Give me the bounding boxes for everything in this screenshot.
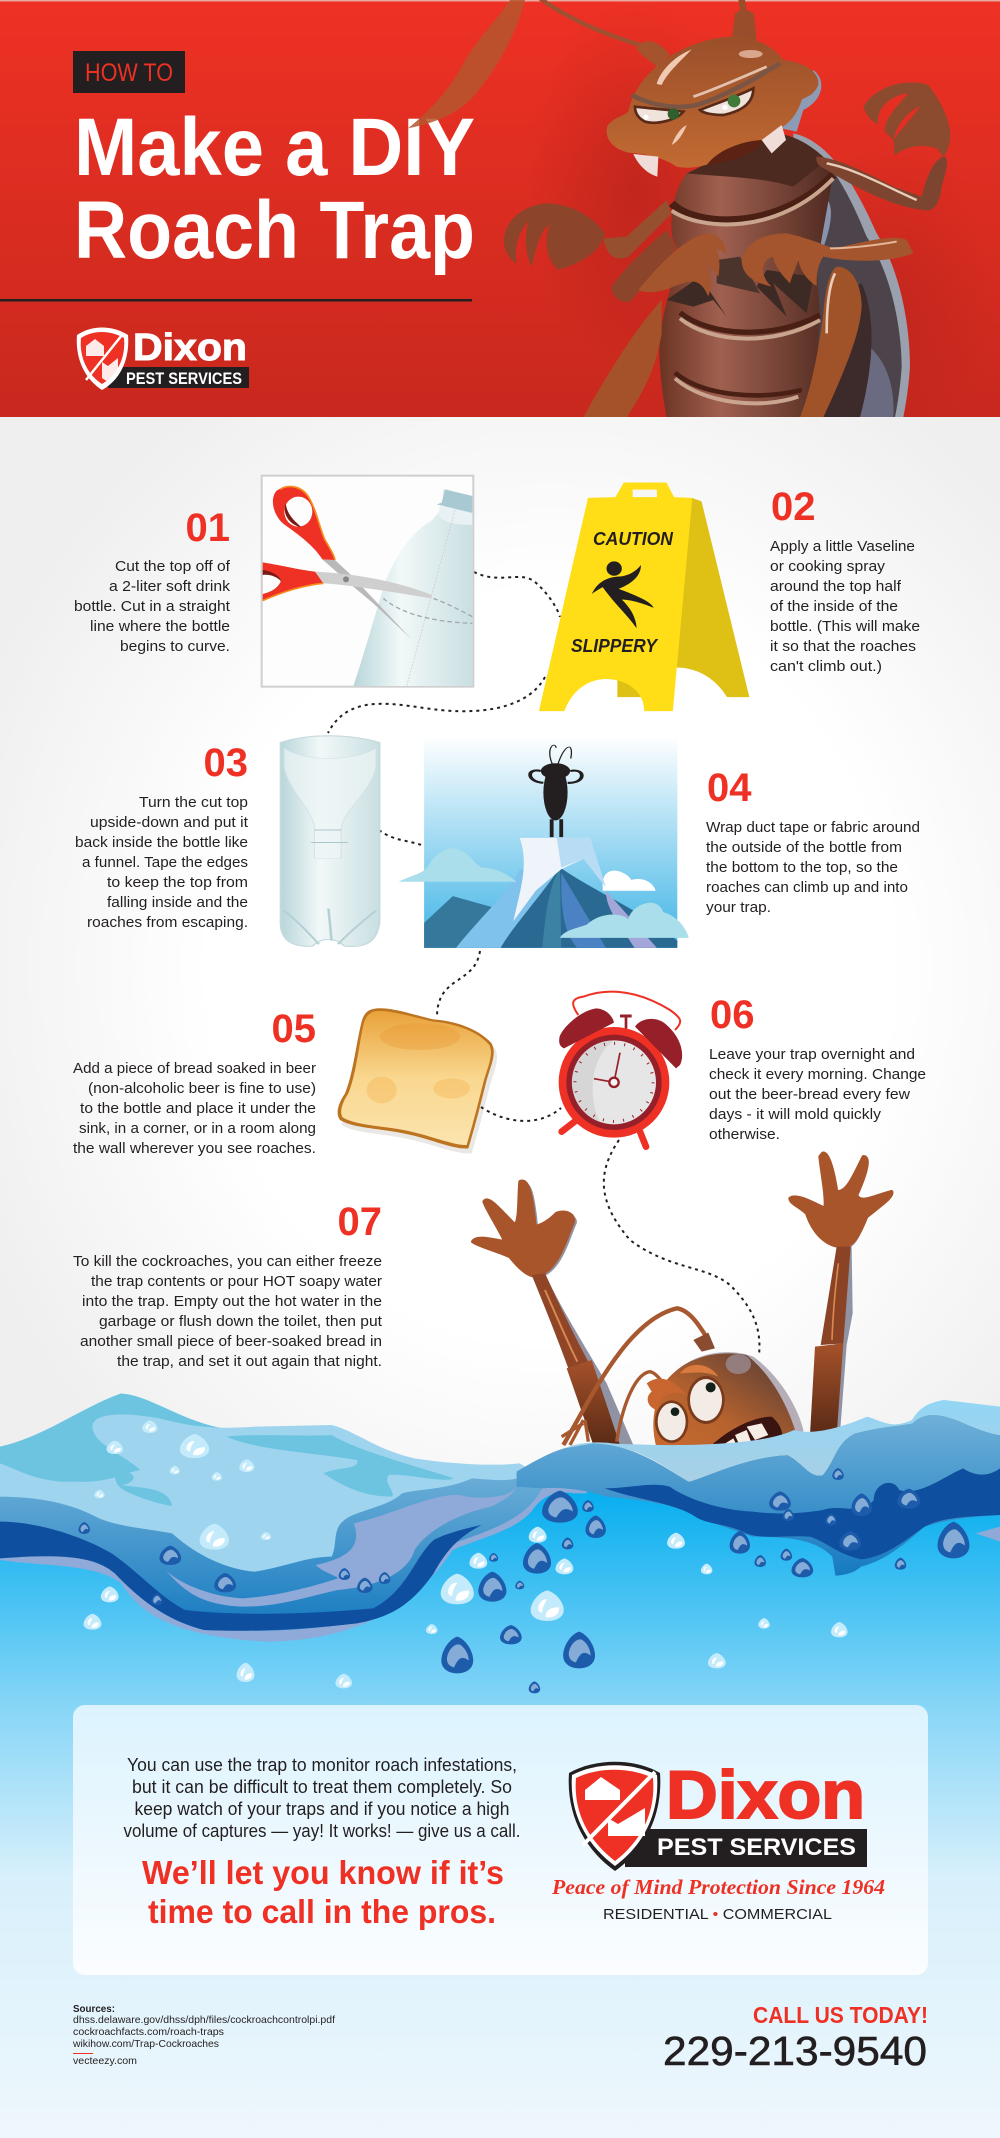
step 02 text: can't climb out.) — [770, 659, 882, 675]
step 02 text — [770, 485, 920, 675]
title: Make a DIY — [74, 102, 475, 193]
text: sources: vecteezy.com — [73, 2055, 137, 2067]
step 02 text: 02 — [771, 485, 816, 529]
droplets: water bubbles — [78, 1420, 969, 1693]
text: closing paragraph: You can use the trap to monitor roach infestations, — [127, 1755, 517, 1775]
title — [74, 102, 475, 276]
sea gradient — [0, 1490, 1000, 2138]
callout: call in the pros: We’ll let you know if it’s — [142, 1854, 504, 1891]
connector: dotted paths between steps — [328, 572, 759, 1355]
illustration: water waves — [0, 1393, 1000, 1642]
step 07 text: garbage or flush down the toilet, then put — [99, 1314, 382, 1330]
step 03 text: to keep the top from — [107, 875, 248, 891]
step 03 text: back inside the bottle like — [75, 835, 248, 851]
logo: dixon small: Dixon — [133, 327, 247, 369]
step 03 text: a funnel. Tape the edges — [82, 855, 248, 871]
step 03 text: roaches from escaping. — [87, 915, 248, 931]
step 05 text: Add a piece of bread soaked in beer — [73, 1061, 316, 1077]
callout: call in the pros: time to call in the pros. — [148, 1893, 496, 1930]
step 01 text: bottle. Cut in a straight — [74, 599, 230, 615]
panel: call to action — [73, 1705, 928, 1975]
logo: dixon large: Peace of Mind Protection Since 1964 — [551, 1875, 885, 1899]
logo: dixon large: Dixon — [666, 1757, 865, 1833]
illustration: toast — [338, 1008, 497, 1153]
title: Roach Trap — [74, 185, 475, 276]
illustration: scissors and bottle — [262, 476, 473, 687]
step 07 text: the trap contents or pour HOT soapy water — [91, 1274, 382, 1290]
text: sources: Sources: — [73, 2003, 115, 2015]
illustration: caution sign: SLIPPERY — [571, 636, 659, 656]
illustration: cut bottle funnel — [281, 736, 379, 946]
step 02 text: it so that the roaches — [770, 639, 916, 655]
tag: how to: HOW TO — [85, 59, 173, 87]
step 04 text: the bottom to the top, so the — [706, 860, 898, 876]
step 04 text: roaches can climb up and into — [706, 880, 908, 896]
step 06 text: otherwise. — [709, 1127, 780, 1143]
step 05 text — [73, 1007, 316, 1157]
illustration: alarm clock — [559, 992, 682, 1147]
logo: dixon small — [77, 327, 249, 390]
step 03 text: falling inside and the — [107, 895, 248, 911]
illustration: cockroach — [408, 0, 950, 417]
step 01 text — [74, 506, 231, 655]
step 04 text: 04 — [707, 766, 752, 810]
step 02 text: or cooking spray — [770, 559, 886, 575]
step 04 text: your trap. — [706, 900, 771, 916]
step 06 text — [709, 993, 926, 1143]
step 05 text: (non-alcoholic beer is fine to use) — [88, 1081, 316, 1097]
text: sources: dhss.delaware.gov/dhss/dph/files/cockroachcontrolpi.pdf — [73, 2014, 335, 2026]
step 05 text: sink, in a corner, or in a room along — [79, 1121, 316, 1137]
step 04 text — [706, 766, 920, 916]
step 02 text: of the inside of the — [770, 599, 898, 615]
step 06 text: Leave your trap overnight and — [709, 1047, 915, 1063]
logo: dixon large: PEST SERVICES — [657, 1834, 856, 1861]
step 07 text: To kill the cockroaches, you can either freeze — [73, 1254, 382, 1270]
step 04 text: Wrap duct tape or fabric around — [706, 820, 920, 836]
page background — [0, 417, 1000, 1517]
logo: dixon small: PEST SERVICES — [126, 369, 242, 388]
step 06 text: check it every morning. Change — [709, 1067, 926, 1083]
step 01 text: Cut the top off of — [115, 559, 231, 575]
call us today and phone number: CALL US TODAY! — [753, 2002, 928, 2028]
step 07 text — [73, 1200, 382, 1370]
callout: call in the pros — [142, 1854, 504, 1930]
illustration: drowning cockroach — [473, 1153, 892, 1452]
text: closing paragraph: volume of captures — yay! It works! — give us a call. — [124, 1821, 520, 1841]
illustration: mountain with roach — [399, 736, 689, 948]
illustration: caution sign: CAUTION — [593, 529, 674, 549]
step 06 text: days - it will mold quickly — [709, 1107, 882, 1123]
step 05 text: to the bottle and place it under the — [80, 1101, 316, 1117]
step 03 text: upside-down and put it — [90, 815, 248, 831]
step 01 text: line where the bottle — [90, 619, 230, 635]
step 03 text: Turn the cut top — [139, 795, 248, 811]
step 01 text: a 2-liter soft drink — [109, 579, 231, 595]
logo: dixon large — [551, 1757, 885, 1923]
text: closing paragraph — [124, 1755, 520, 1841]
call us today and phone number: 229-213-9540 — [663, 2028, 927, 2074]
step 07 text: another small piece of beer-soaked bread in — [80, 1334, 382, 1350]
text: sources — [72, 2003, 335, 2067]
text: closing paragraph: but it can be difficult to treat them completely. So — [132, 1777, 512, 1797]
step 02 text: bottle. (This will make — [770, 619, 920, 635]
illustration: caution sign — [539, 482, 749, 711]
text: sources: cockroachfacts.com/roach-traps — [73, 2026, 224, 2038]
panel: header — [0, 0, 1000, 417]
step 03 text: 03 — [204, 741, 248, 785]
tag: how to — [73, 51, 185, 93]
step 05 text: the wall wherever you see roaches. — [73, 1141, 316, 1157]
step 05 text: 05 — [272, 1007, 316, 1051]
step 02 text: Apply a little Vaseline — [770, 539, 915, 555]
step 01 text: 01 — [186, 506, 230, 550]
step 06 text: 06 — [710, 993, 754, 1037]
step 07 text: the trap, and set it out again that night. — [117, 1354, 382, 1370]
step 04 text: the outside of the bottle from — [706, 840, 902, 856]
text: sources: wikihow.com/Trap-Cockroaches — [72, 2038, 219, 2050]
step 07 text: 07 — [338, 1200, 382, 1244]
step 03 text — [75, 741, 248, 931]
logo: dixon large: RESIDENTIAL • COMMERCIAL — [603, 1906, 832, 1923]
step 06 text: out the beer-bread every few — [709, 1087, 911, 1103]
call us today and phone number — [663, 2002, 928, 2074]
step 01 text: begins to curve. — [120, 639, 230, 655]
text: closing paragraph: keep watch of your traps and if you notice a high — [134, 1799, 510, 1819]
step 02 text: around the top half — [770, 579, 902, 595]
step 07 text: into the trap. Empty out the hot water in the — [82, 1294, 382, 1310]
